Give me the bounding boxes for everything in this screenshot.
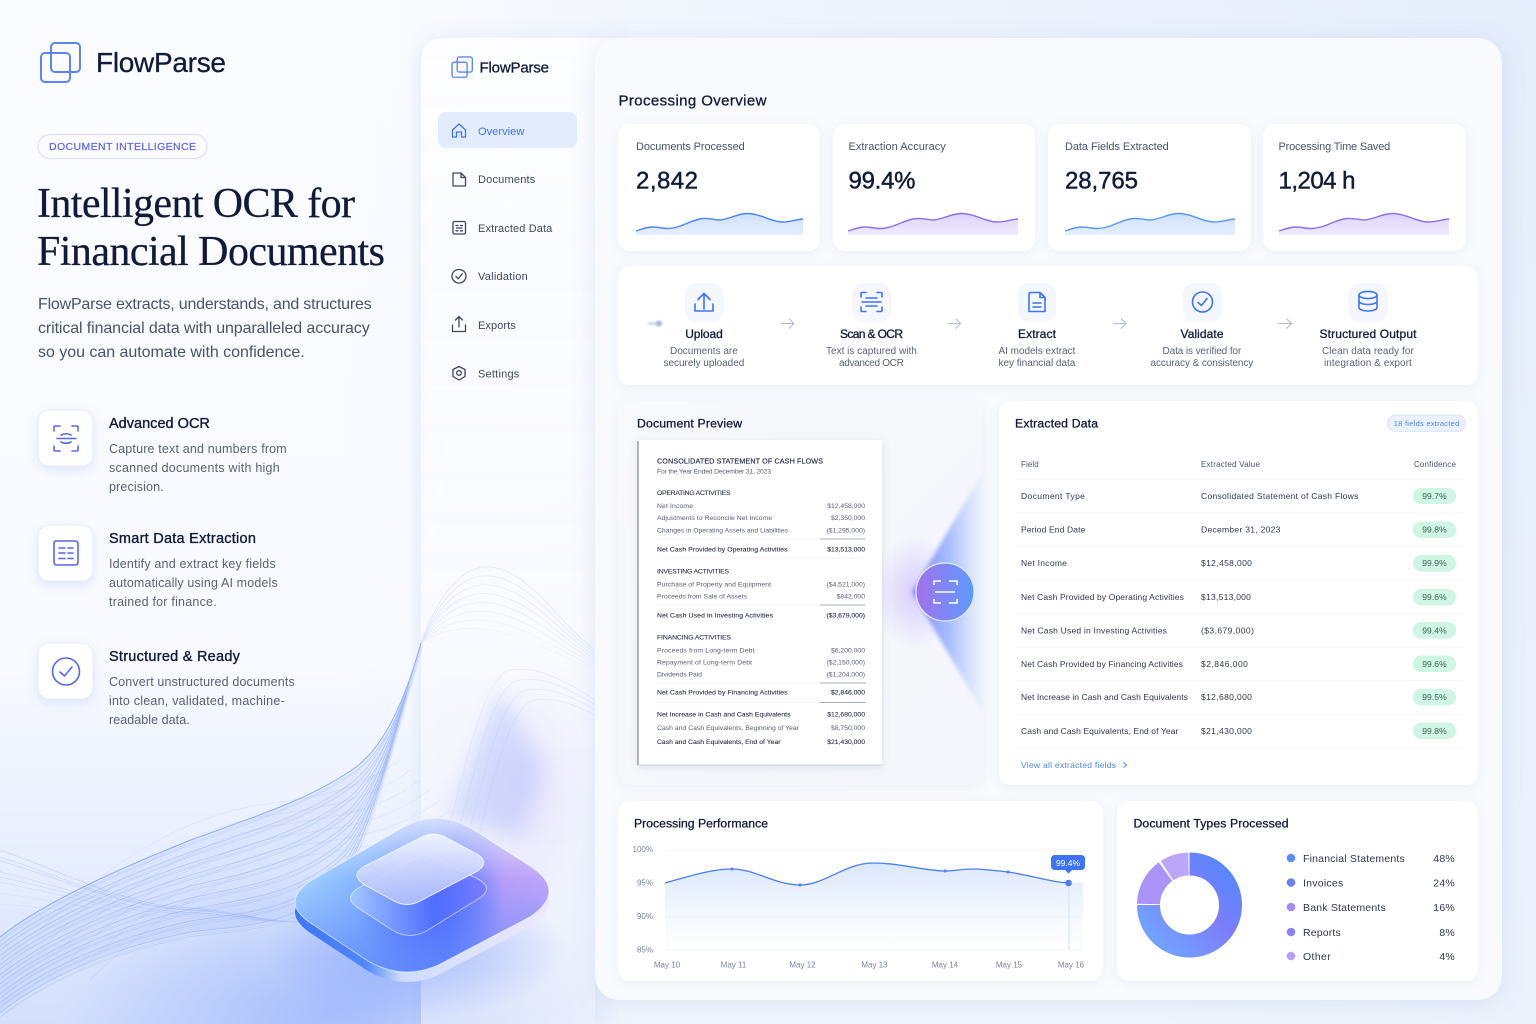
- step: Structured Output: Clean data ready for: [1322, 346, 1414, 357]
- feature: Smart Data Extraction: Identify and extract key fields: [109, 557, 276, 571]
- line chart: [633, 845, 1085, 970]
- document sheet: Dividends Paid: [657, 672, 702, 678]
- document sheet: ($1,295,000): [826, 528, 865, 534]
- sparkline: [1279, 214, 1449, 235]
- panel: document preview: [618, 401, 984, 785]
- tooltip: 99.4%: [1051, 855, 1085, 874]
- table row: End of Year: $21,430,000: [1201, 726, 1252, 736]
- document sheet: ($1,204,000): [826, 672, 865, 678]
- intro paragraph: [38, 296, 372, 361]
- table row: Net Income: 99.9%: [1422, 558, 1447, 568]
- main dashboard panel: [595, 38, 1502, 1000]
- table row: Document Type: [1014, 488, 1464, 513]
- icon: glass isometric platform: [295, 818, 549, 982]
- step: Extract: Extract: [1018, 327, 1057, 341]
- sparkline: [848, 214, 1018, 235]
- document sheet: INVESTING ACTIVITIES: [657, 568, 729, 576]
- line chart: May 13: [861, 960, 888, 970]
- flowing wave lines: [0, 567, 619, 1018]
- table row: Document Type: 99.7%: [1422, 491, 1447, 501]
- line chart: May 11: [721, 960, 747, 970]
- icon: blurred arrow: [648, 320, 662, 326]
- legend: [1287, 853, 1455, 963]
- donut chart: [1148, 864, 1230, 946]
- icon: scan badge: [916, 563, 974, 621]
- document sheet: Proceeds from Sale of Assets: [657, 594, 748, 600]
- intro paragraph: FlowParse extracts, understands, and structures: [38, 296, 372, 313]
- document sheet: Cash and Cash Equivalents, End of Year: [657, 739, 781, 746]
- table row: Financing Activities: [1014, 656, 1464, 680]
- table row: Net Increase: Net Increase in Cash and Cash Equivalents: [1021, 692, 1188, 702]
- nav item: Exports: Exports: [478, 320, 516, 332]
- document sheet: Purchase of Property and Equipment: [657, 581, 771, 588]
- document sheet: ($4,521,000): [826, 581, 865, 588]
- arrow: [1278, 318, 1292, 328]
- table row: End of Year: [1014, 722, 1464, 748]
- document sheet: $842,000: [837, 594, 865, 600]
- step: Extract: AI models extract: [998, 346, 1076, 357]
- table row: Investing Activities: Net Cash Used in Investing Activities: [1021, 626, 1167, 636]
- sidebar panel background: [421, 38, 620, 1024]
- step: Extract: key financial data: [998, 358, 1076, 369]
- line chart: 95%: [637, 878, 653, 888]
- table row: Operating Activities: Net Cash Provided by Operating Activities: [1021, 592, 1184, 602]
- step: Structured Output: integration & export: [1324, 358, 1412, 369]
- table row: Net Income: $12,458,000: [1201, 558, 1252, 568]
- line chart: 90%: [637, 912, 653, 921]
- feature: Smart Data Extraction: [38, 525, 278, 609]
- legend: 48%: [1433, 853, 1455, 865]
- table row: Operating Activities: 99.6%: [1422, 592, 1447, 602]
- document sheet: Changes in Operating Assets and Liabilities: [657, 528, 789, 534]
- table row: Financing Activities: Net Cash Provided by Financing Activities: [1021, 659, 1183, 669]
- legend: Financial Statements: [1303, 853, 1405, 865]
- legend: 4%: [1439, 951, 1455, 963]
- table row: Investing Activities: ($3,679,000): [1201, 626, 1254, 636]
- nav item: Overview (active): Overview: [478, 126, 524, 138]
- nav item: Extracted Data: Extracted Data: [478, 223, 553, 235]
- nav item: Documents: Documents: [478, 174, 536, 186]
- heading: Processing Overview: Processing Overview: [618, 92, 767, 110]
- sidebar navigation: [438, 112, 577, 380]
- step: Upload: securely uploaded: [664, 358, 744, 369]
- panel: document types: Document Types Processed: [1134, 816, 1288, 830]
- sparkline: [636, 214, 803, 235]
- table row: Document Type: Document Type: [1021, 491, 1085, 501]
- table row: Operating Activities: [1014, 589, 1464, 614]
- intro paragraph: critical financial data with unparalleled accuracy: [38, 320, 370, 337]
- title: Intelligent OCR for: [37, 181, 355, 227]
- table header: Field: [1021, 460, 1039, 469]
- soft platform glow: [265, 680, 590, 1020]
- feature: Structured & Ready: into clean, validated, machine-: [109, 694, 285, 708]
- step: Structured Output: [1320, 283, 1417, 369]
- table row: Investing Activities: 99.4%: [1422, 626, 1447, 636]
- step: Scan & OCR: Text is captured with: [826, 346, 917, 357]
- step: Validate: [1150, 283, 1254, 369]
- nav item: Settings: [453, 366, 520, 380]
- table row: Document Type: Consolidated Statement of Cash Flows: [1201, 491, 1358, 501]
- document sheet: ($3,679,000): [826, 612, 865, 620]
- legend: 24%: [1433, 877, 1455, 889]
- table row: Period End Date: 99.8%: [1422, 524, 1447, 534]
- feature: Advanced OCR: Capture text and numbers from: [109, 442, 287, 456]
- KPI card: Documents Processed: [618, 124, 820, 251]
- table row: Net Income: Net Income: [1021, 558, 1067, 568]
- step: Upload: Upload: [685, 327, 723, 341]
- feature: Smart Data Extraction: Smart Data Extraction: [109, 531, 256, 547]
- KPI card: Data Fields Extracted: [1048, 124, 1251, 251]
- document sheet: $12,680,000: [827, 712, 865, 718]
- KPI card: Processing Time Saved: Processing Time Saved: [1278, 141, 1390, 153]
- legend: 8%: [1439, 927, 1455, 939]
- feature: Smart Data Extraction: automatically using AI models: [109, 576, 278, 590]
- feature: Structured & Ready: readable data.: [109, 713, 190, 727]
- KPI card: Extraction Accuracy: [833, 124, 1035, 251]
- tag: document intelligence: DOCUMENT INTELLIGENCE: [49, 141, 196, 153]
- feature: Smart Data Extraction: trained for finance.: [109, 595, 217, 609]
- step: Scan & OCR: Scan & OCR: [840, 327, 903, 341]
- scan beam: [873, 470, 984, 714]
- feature: Structured & Ready: [38, 643, 295, 727]
- step: Structured Output: Structured Output: [1320, 327, 1417, 341]
- document sheet: Repayment of Long-term Debt: [657, 660, 752, 666]
- nav item: Extracted Data: [453, 222, 553, 235]
- arrow: [1113, 318, 1126, 328]
- table row: Period End Date: [1014, 522, 1464, 546]
- icon: check circle: [38, 643, 93, 699]
- line chart: May 10: [654, 960, 681, 970]
- document sheet: Proceeds from Long-term Debt: [657, 648, 755, 654]
- icon: data sheet: [38, 525, 93, 581]
- title: Financial Documents: [37, 229, 385, 275]
- table row: Investing Activities: [1014, 622, 1464, 647]
- step: Upload: Documents are: [670, 346, 738, 357]
- KPI card: Documents Processed: Documents Processed: [636, 141, 745, 153]
- KPI card: Data Fields Extracted: Data Fields Extracted: [1065, 141, 1169, 153]
- line chart: 85%: [637, 946, 653, 954]
- link: view all fields: View all extracted fields: [1021, 760, 1116, 770]
- KPI card: Processing Time Saved: [1263, 124, 1466, 251]
- table header: Confidence: [1414, 460, 1456, 469]
- feature: Advanced OCR: Advanced OCR: [109, 416, 210, 432]
- feature: Advanced OCR: scanned documents with high: [109, 461, 280, 475]
- legend: Other: [1303, 951, 1331, 963]
- step: Validate: Validate: [1180, 327, 1224, 341]
- table row: Net Income: [1014, 555, 1464, 580]
- document sheet: Adjustments to Reconcile Net Income: [657, 515, 772, 522]
- step: Scan & OCR: advanced OCR: [839, 358, 904, 369]
- sidebar logo: FlowParse: [480, 60, 549, 76]
- table row: Financing Activities: $2,846,000: [1201, 659, 1248, 669]
- panel: document preview: Document Preview: [637, 416, 742, 430]
- document sheet: For the Year Ended December 31, 2023: [657, 468, 771, 476]
- document sheet: Net Cash Provided by Operating Activities: [657, 546, 788, 554]
- panel: processing performance: [618, 801, 1103, 981]
- feature: Structured & Ready: Convert unstructured documents: [109, 675, 295, 689]
- legend: 16%: [1433, 902, 1455, 914]
- table row: End of Year: 99.8%: [1422, 726, 1447, 736]
- step: Validate: Data is verified for: [1162, 346, 1242, 357]
- arrow: [781, 318, 794, 328]
- intro paragraph: so you can automate with confidence.: [38, 344, 305, 361]
- KPI card: Processing Time Saved: 1,204 h: [1278, 168, 1356, 194]
- document sheet: Net Cash Used in Investing Activities: [657, 612, 774, 620]
- KPI card: Extraction Accuracy: Extraction Accuracy: [848, 141, 946, 153]
- document sheet: CONSOLIDATED STATEMENT OF CASH FLOWS: [657, 456, 823, 466]
- line chart: May 12: [789, 960, 816, 970]
- sparkline: [1065, 214, 1235, 235]
- nav item: Overview (active): [438, 112, 577, 148]
- table header: [1014, 460, 1464, 479]
- document sheet: Net Income: [657, 503, 693, 510]
- step: Upload: [664, 283, 744, 369]
- document sheet: $13,513,000: [827, 546, 865, 554]
- table row: End of Year: Cash and Cash Equivalents, End of Year: [1021, 726, 1179, 736]
- document sheet: OPERATING ACTIVITIES: [657, 490, 731, 497]
- document sheet: $2,846,000: [831, 690, 865, 696]
- arrow: [948, 318, 960, 328]
- document sheet: Cash and Cash Equivalents, Beginning of Year: [657, 725, 800, 732]
- KPI card: Documents Processed: 2,842: [636, 168, 698, 194]
- nav item: Documents: [453, 173, 536, 186]
- tag: document intelligence: [38, 134, 207, 158]
- legend: Reports: [1303, 927, 1341, 939]
- document sheet: $12,458,000: [827, 503, 865, 510]
- step: Validate: accuracy & consistency: [1150, 358, 1254, 369]
- table row: Operating Activities: $13,513,000: [1201, 592, 1251, 602]
- legend: Bank Statements: [1303, 902, 1386, 914]
- nav item: Validation: [452, 270, 528, 283]
- logo: FlowParse: FlowParse: [96, 47, 226, 78]
- badge: fields extracted: [1388, 415, 1466, 432]
- logo: FlowParse: [41, 43, 226, 82]
- panel: extracted data: Extracted Data: [1015, 416, 1098, 430]
- line chart: 100%: [633, 845, 653, 854]
- KPI card: Extraction Accuracy: 99.4%: [848, 168, 916, 194]
- title: [37, 181, 385, 275]
- document sheet: $6,200,000: [831, 648, 865, 654]
- nav item: Validation: Validation: [478, 271, 528, 283]
- step: Scan & OCR: [826, 283, 917, 369]
- nav item: Settings: Settings: [478, 368, 520, 380]
- document sheet: FINANCING ACTIVITIES: [657, 634, 731, 642]
- process flow panel: [618, 266, 1478, 385]
- table row: Period End Date: Period End Date: [1021, 524, 1086, 534]
- line chart: May 16: [1058, 960, 1085, 970]
- document sheet: $2,350,000: [831, 515, 865, 522]
- panel: document types: [1117, 801, 1478, 981]
- legend: Invoices: [1303, 877, 1344, 889]
- sidebar logo: [452, 57, 549, 77]
- panel: extracted data: [999, 401, 1478, 785]
- table row: Net Increase: $12,680,000: [1201, 692, 1252, 702]
- badge: fields extracted: 18 fields extracted: [1394, 419, 1459, 428]
- feature: Advanced OCR: [38, 410, 287, 494]
- icon: OCR scan frame: [38, 410, 93, 466]
- feature: Structured & Ready: Structured & Ready: [109, 649, 241, 665]
- document sheet: $8,750,000: [831, 725, 865, 732]
- line chart: May 14: [932, 960, 959, 970]
- table header: Extracted Value: [1201, 460, 1260, 469]
- panel: processing performance: Processing Performance: [634, 816, 768, 830]
- nav item: Exports: [452, 316, 516, 332]
- document sheet: ($2,150,000): [826, 660, 865, 666]
- feature: Advanced OCR: precision.: [109, 480, 164, 494]
- table row: Net Increase: 99.5%: [1422, 692, 1447, 702]
- document sheet: Net Cash Provided by Financing Activities: [657, 690, 788, 696]
- line chart: May 15: [996, 960, 1023, 970]
- document sheet: $21,430,000: [827, 739, 865, 746]
- table row: Financing Activities: 99.6%: [1422, 659, 1447, 669]
- KPI card: Data Fields Extracted: 28,765: [1065, 168, 1138, 194]
- document sheet: [638, 440, 882, 765]
- table row: Period End Date: December 31, 2023: [1201, 524, 1281, 534]
- document sheet: Net Increase in Cash and Cash Equivalents: [657, 712, 791, 718]
- tooltip: 99.4%: 99.4%: [1056, 858, 1080, 868]
- step: Extract: [998, 283, 1076, 369]
- table row: Net Increase: [1014, 689, 1464, 714]
